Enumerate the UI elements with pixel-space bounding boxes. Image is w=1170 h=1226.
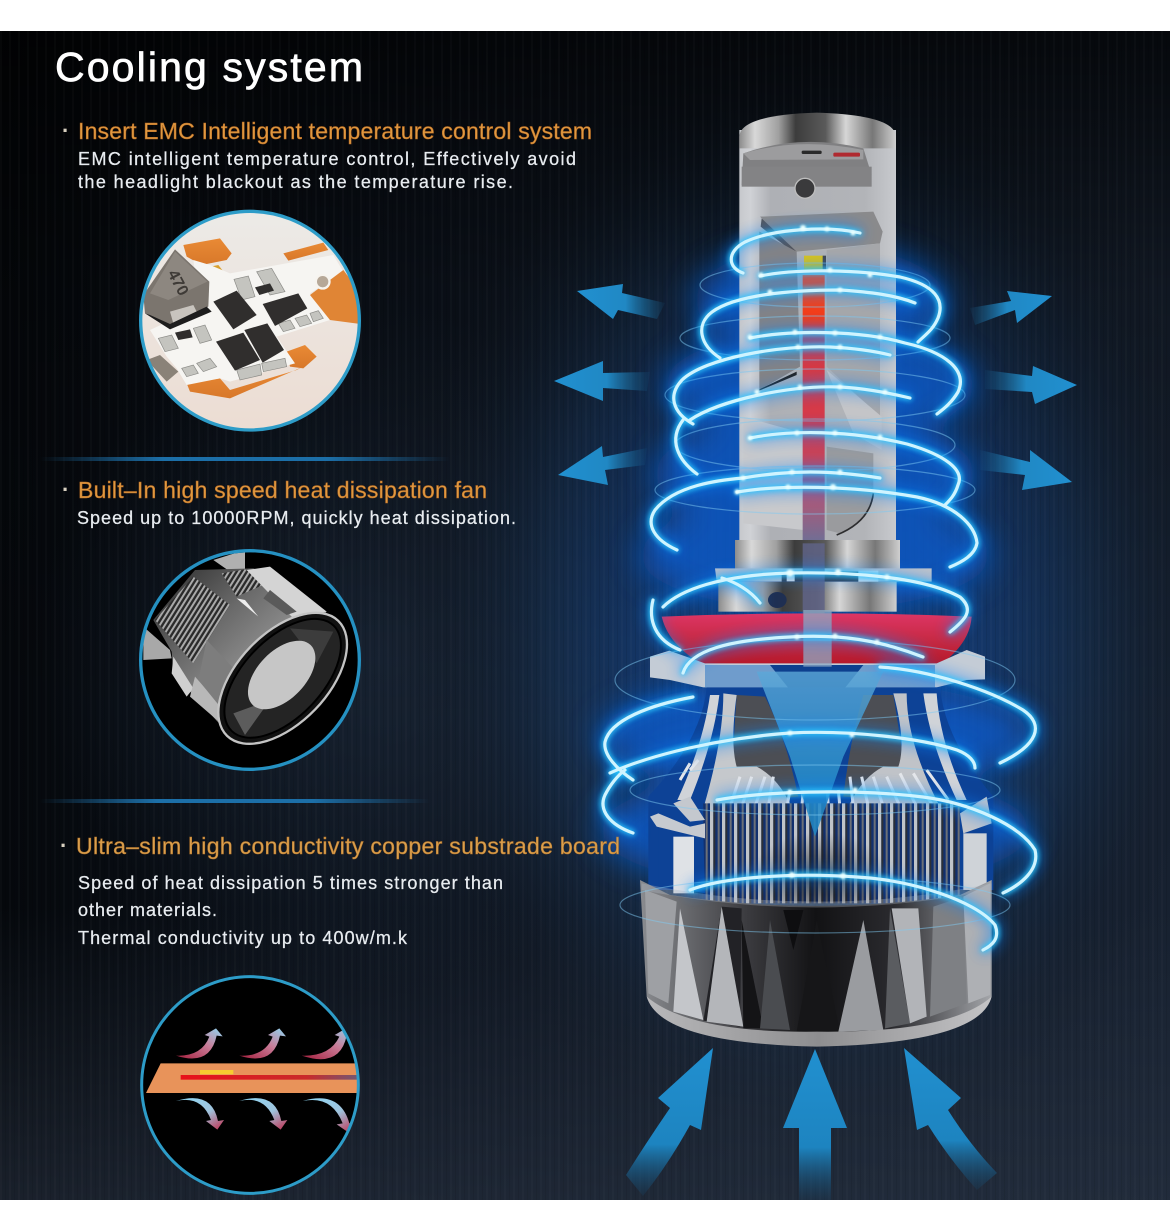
- lower neck: [718, 582, 897, 612]
- section 2 heading: ·: [62, 477, 69, 502]
- fan hub: [248, 640, 316, 710]
- bulb upper shaft: [715, 113, 932, 613]
- section 1 heading: ·: [62, 118, 69, 143]
- mounting flange: [650, 650, 985, 687]
- section 3 description: [78, 873, 503, 948]
- glowing spiral strands: [603, 229, 1036, 950]
- white footer band: [0, 1200, 1170, 1226]
- fan housing body: [153, 568, 327, 732]
- downward heat arrows: [176, 1098, 354, 1132]
- heat sink base: [648, 687, 993, 890]
- flange: [715, 568, 932, 582]
- panel: copper heat-flow diagram: [140, 975, 360, 1195]
- side arrows left: [554, 284, 665, 485]
- curved grey fins left: [730, 695, 798, 803]
- dark fin shadow: [750, 813, 890, 907]
- sparkles: [734, 225, 890, 879]
- section 1 description: the headlight blackout as the temperature rise.: [78, 172, 513, 192]
- vertical cooling fins: [703, 803, 960, 903]
- section 1 heading: Insert EMC Intelligent temperature control system: [78, 118, 592, 144]
- silver rim: [647, 997, 992, 1047]
- bulb lower body: [640, 610, 993, 1047]
- section 2 heading: Built–In high speed heat dissipation fan: [78, 477, 487, 503]
- marking on inductor: 470: [164, 267, 191, 299]
- title: Cooling system: [55, 44, 363, 90]
- LED chip: [804, 256, 824, 271]
- section 2 description: Speed up to 10000RPM, quickly heat dissipation.: [77, 508, 516, 528]
- side arrows right: [970, 291, 1077, 490]
- lower housing: [640, 880, 992, 1038]
- panel: cooling fan close-up: [139, 549, 361, 771]
- inductor: [143, 249, 209, 325]
- white header band: [0, 0, 1170, 31]
- screw hole: [795, 178, 815, 198]
- cooling air spiral: [603, 225, 1036, 950]
- side pillars: [658, 817, 705, 893]
- solder pads: [158, 268, 323, 380]
- inner panel: [759, 232, 800, 390]
- red thermal strip: [803, 275, 825, 543]
- copper tabs: [183, 238, 328, 398]
- cap underside with contacts: [742, 142, 872, 185]
- curved grey fins right: [843, 695, 910, 800]
- upward heat arrows: [176, 1028, 353, 1059]
- chrome collar: [735, 540, 900, 570]
- white board: [150, 255, 343, 385]
- fork fin tips: [680, 760, 948, 808]
- section 1 description: [78, 149, 576, 192]
- section 3 description: Speed of heat dissipation 5 times stronger than: [78, 873, 503, 893]
- chrome cap: [739, 113, 896, 148]
- divider: [40, 457, 450, 461]
- housing facets: [645, 883, 990, 1032]
- upper notch: [760, 212, 883, 252]
- red rubber ring: [662, 613, 972, 665]
- panel: circuit board close-up: [139, 210, 361, 432]
- section 3 description: Thermal conductivity up to 400w/m.k: [78, 928, 408, 948]
- section 3 description: other materials.: [78, 900, 217, 920]
- section 3 heading: Ultra–slim high conductivity copper substrade board: [76, 833, 620, 859]
- section 1 description: EMC intelligent temperature control, Effectively avoid: [78, 149, 576, 169]
- bottom intake arrows: [626, 1048, 997, 1200]
- divider: [40, 799, 430, 803]
- bulb: [640, 113, 993, 1047]
- copper plate: [146, 1063, 360, 1093]
- section 3 heading: ·: [60, 833, 67, 858]
- blue cone of air: [757, 672, 883, 837]
- black chips: [175, 283, 307, 371]
- fan mouth: [218, 612, 348, 745]
- thin rings: [615, 263, 1015, 933]
